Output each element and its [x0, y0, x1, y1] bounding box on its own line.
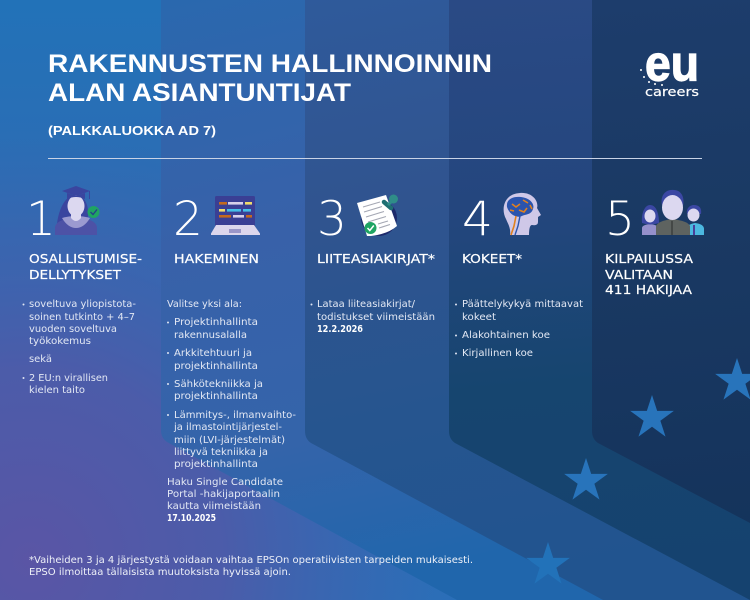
step 5: selection — [605, 190, 704, 297]
text: fields: Haku Single Candidate — [167, 477, 283, 488]
text: test list — [455, 299, 583, 359]
title — [48, 50, 492, 107]
text: test list: Kirjallinen koe — [462, 348, 533, 359]
text: fields: Arkkitehtuuri ja — [174, 348, 252, 359]
heading: DELLYTYKSET — [29, 267, 121, 282]
heading: LIITEASIAKIRJAT* — [317, 251, 435, 266]
step 1: eligibility — [22, 186, 142, 396]
text: fields: Sähkötekniikka ja — [174, 379, 263, 390]
text: fields: kautta viimeistään — [167, 501, 261, 512]
text: requirements — [22, 299, 136, 396]
text: fields: Valitse yksi ala: — [167, 299, 242, 310]
heading: OSALLISTUMISE- — [29, 251, 142, 266]
title: RAKENNUSTEN HALLINNOINNIN — [48, 50, 492, 78]
icon: document — [357, 194, 398, 236]
number 1: 1 — [26, 192, 56, 247]
logo: EU careers: careers — [645, 84, 699, 99]
heading — [605, 251, 694, 297]
text: documents deadline: todistukset viimeistään — [317, 312, 435, 323]
title: ALAN ASIANTUNTIJAT — [48, 79, 351, 107]
text: test list: Alakohtainen koe — [462, 330, 550, 341]
text: fields: Projektinhallinta — [174, 317, 258, 328]
text: requirements: sekä — [29, 354, 52, 365]
text: fields — [167, 299, 296, 524]
number 5: 5 — [605, 192, 635, 247]
number 3: 3 — [317, 192, 347, 247]
text: requirements: työkokemus — [29, 336, 91, 347]
number 4: 4 — [462, 192, 493, 247]
text: requirements: vuoden soveltuva — [29, 324, 117, 335]
icon: graduate — [55, 186, 100, 235]
text: fields: liittyvä tekniikka ja — [174, 447, 268, 458]
icon: laptop — [211, 196, 260, 235]
text: fields: miin (LVI-järjestelmät) — [174, 435, 285, 446]
icon: head with brain — [504, 193, 541, 235]
background band: column 5 — [592, 0, 750, 523]
text: test list: Päättelykykyä mittaavat — [462, 299, 583, 310]
text: test list: kokeet — [462, 312, 496, 323]
background band: column 4 — [449, 0, 750, 600]
stars — [526, 358, 750, 584]
icon: people — [642, 190, 704, 235]
number 2: 2 — [173, 192, 203, 247]
text: requirements: soinen tutkinto + 4–7 — [29, 312, 135, 323]
subtitle: (PALKKALUOKKA AD 7) — [48, 123, 216, 138]
text: fields: Portal -hakijaportaalin — [167, 489, 280, 500]
background band: column 2 — [161, 0, 750, 600]
text: fields: projektinhallinta — [174, 361, 258, 372]
step 4: tests — [455, 192, 583, 359]
text: fields: ja ilmastointijärjestel- — [173, 422, 282, 433]
footnote: *Vaiheiden 3 ja 4 järjestystä voidaan vaihtaa EPSOn operatiivisten tarpeiden mukaisesti. — [29, 555, 473, 566]
text: fields: Lämmitys-, ilmanvaihto- — [174, 410, 296, 421]
heading: HAKEMINEN — [174, 251, 259, 266]
heading: KOKEET* — [462, 251, 522, 266]
heading — [29, 251, 142, 282]
footnote — [29, 555, 473, 578]
heading: KILPAILUSSA — [605, 251, 694, 266]
text: requirements: soveltuva yliopistota- — [29, 299, 136, 310]
text: fields: projektinhallinta — [174, 391, 258, 402]
text: requirements: kielen taito — [29, 385, 85, 396]
text: fields: rakennusalalla — [174, 330, 247, 341]
background band: column 3 — [305, 0, 750, 600]
text: documents deadline: Lataa liiteasiakirjat/ — [317, 299, 416, 310]
text: requirements: 2 EU:n virallisen — [29, 373, 108, 384]
text: fields: 17.10.2025 — [167, 513, 216, 524]
text: documents deadline: 12.2.2026 — [317, 324, 363, 335]
footnote: EPSO ilmoittaa tällaisista muutoksista hyvissä ajoin. — [29, 567, 291, 578]
step 2: application — [167, 192, 296, 524]
text: fields: projektinhallinta — [174, 459, 258, 470]
text: documents deadline — [310, 299, 435, 335]
step 3: documents — [310, 192, 435, 335]
logo: EU careers: eu — [645, 36, 699, 92]
heading: 411 HAKIJAA — [605, 282, 692, 297]
heading: VALITAAN — [605, 267, 673, 282]
